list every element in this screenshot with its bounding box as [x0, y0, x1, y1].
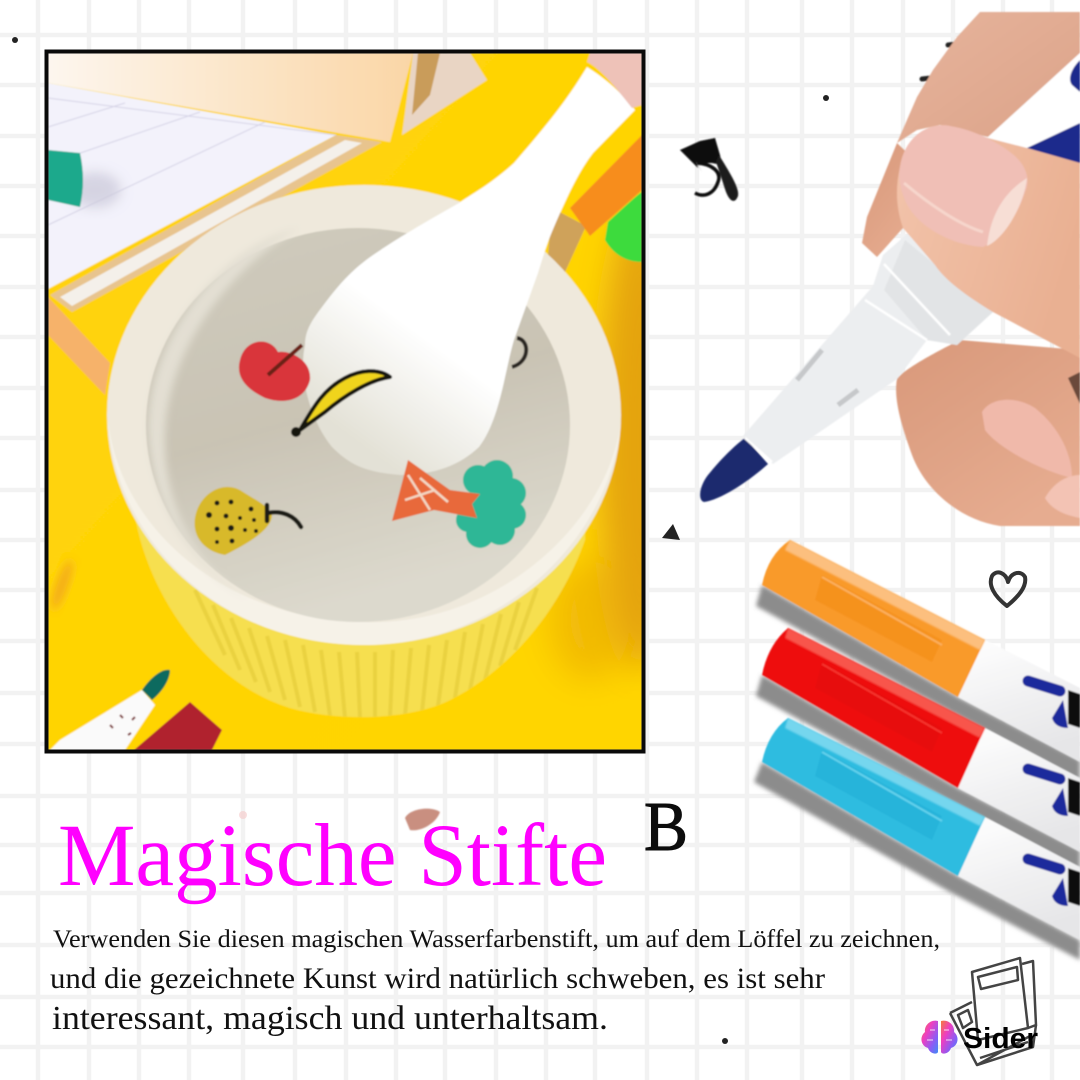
- icon: brain: [921, 1021, 958, 1054]
- spoon: [303, 53, 642, 475]
- doodle: heart: [991, 572, 1025, 606]
- orange marker: [762, 540, 1080, 762]
- markers: orange, red, blue: [754, 540, 1080, 960]
- doodle: books: [950, 958, 1036, 1065]
- pens top right: [548, 135, 642, 272]
- doodle: dots: [12, 37, 829, 1044]
- smudges behind title: [239, 809, 440, 830]
- doodle: triangle: [662, 524, 680, 540]
- photo frame: [46, 52, 644, 752]
- back finger: [862, 143, 925, 257]
- doodle ticks behind hand: [922, 44, 957, 79]
- drawing: banana: [291, 371, 390, 437]
- letter mark B: B: [644, 789, 688, 866]
- title: Magische Stifte: [58, 807, 607, 905]
- description text: interessant, magisch und unterhaltsam.: [52, 1000, 608, 1037]
- bowl: [107, 185, 621, 718]
- drawing: pear: [195, 487, 301, 555]
- hand holding pen: [700, 12, 1080, 526]
- drawing: carrot: [392, 460, 480, 521]
- drawing: broccoli: [456, 460, 526, 548]
- red marker: [762, 628, 1080, 852]
- doodle: scribble mark: [680, 138, 738, 201]
- description text: Verwenden Sie diesen magischen Wasserfarbenstift, um auf dem Löffel zu zeichnen,: [53, 926, 940, 953]
- notebook: [48, 53, 487, 312]
- description text: und die gezeichnete Kunst wird natürlich schweben, es ist sehr: [50, 962, 825, 995]
- drawing: apple: [239, 342, 310, 401]
- lower finger: [896, 340, 1080, 526]
- photo: floating drawing in a bowl: [46, 52, 680, 752]
- thumbnail: [899, 125, 1028, 247]
- marker and red cap bottom left: [50, 670, 222, 750]
- index finger: [897, 12, 1080, 143]
- blue marker: [762, 718, 1080, 940]
- description text: [50, 926, 940, 1037]
- pen tip: [700, 438, 768, 502]
- green pen cap: [48, 150, 121, 208]
- lower fingernail: [982, 400, 1072, 478]
- watermark: Sider logo: Sider: [963, 1023, 1038, 1055]
- pen body: [743, 234, 993, 464]
- orange ribbon: [48, 297, 110, 395]
- marker shadows: [754, 585, 1080, 960]
- pen barrel: [960, 53, 1080, 170]
- watermark: Sider logo: [921, 1021, 1038, 1055]
- thumb: [897, 125, 1080, 358]
